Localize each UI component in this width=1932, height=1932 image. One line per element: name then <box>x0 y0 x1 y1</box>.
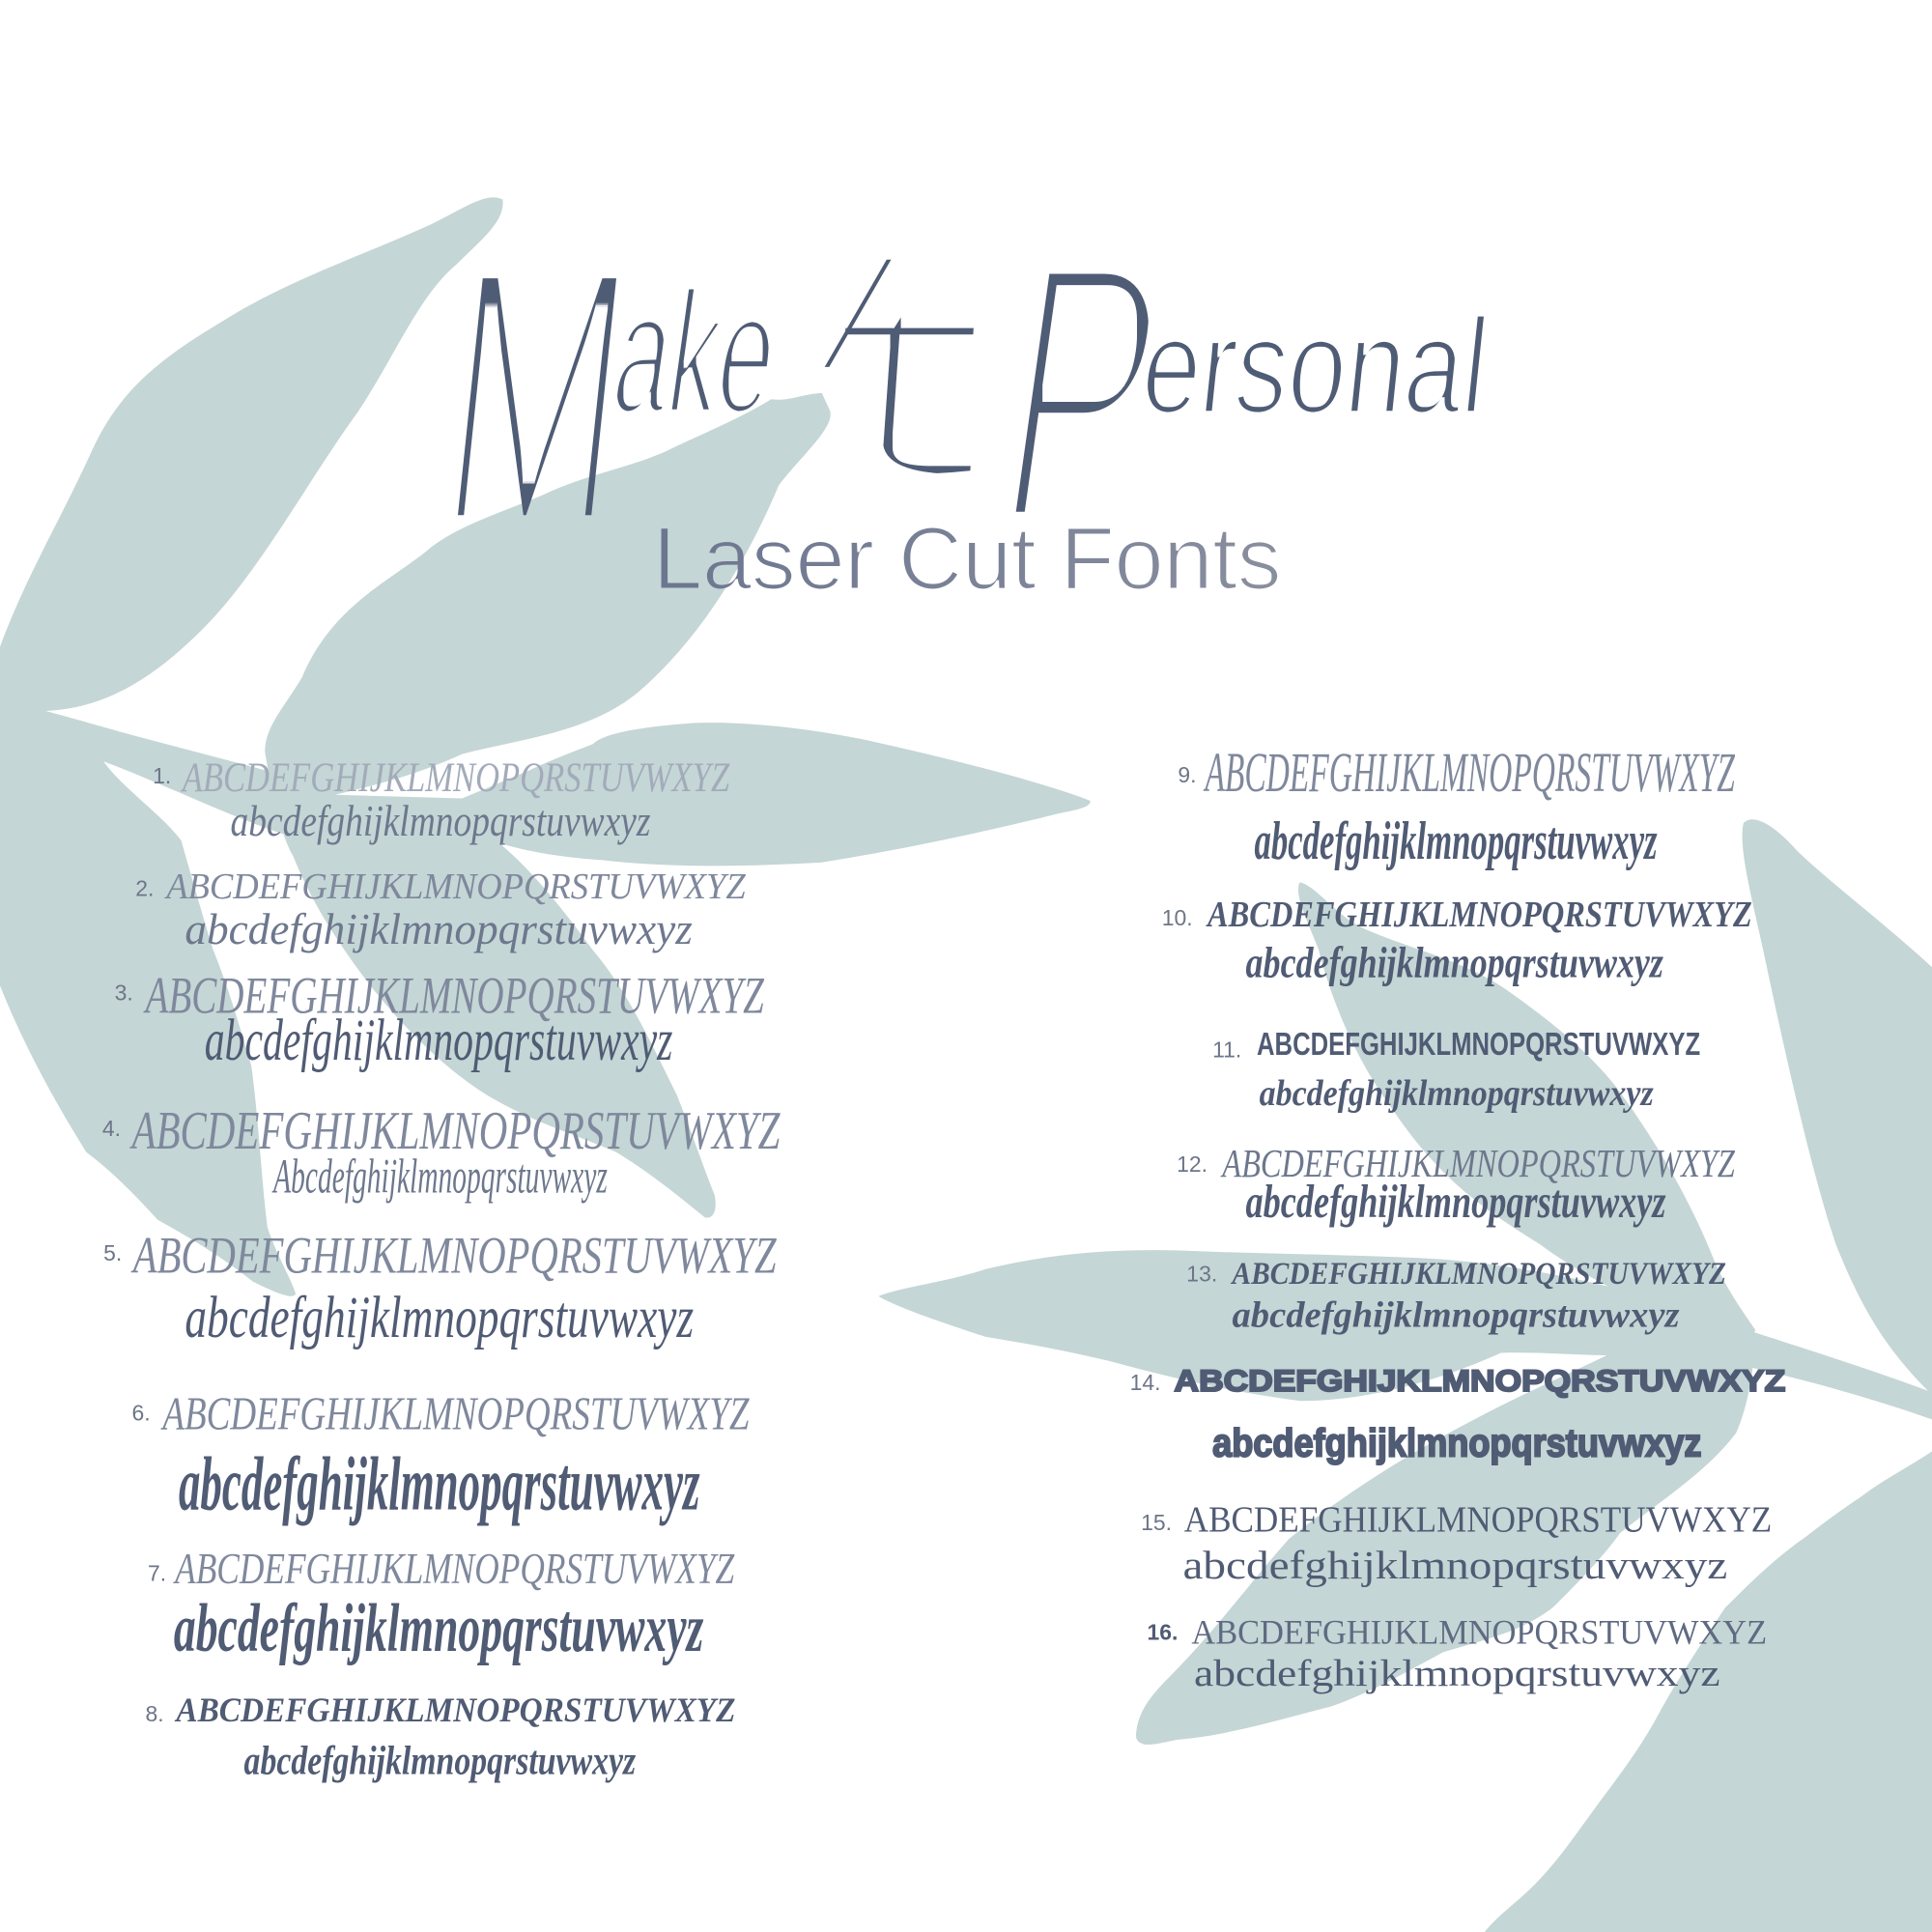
font sample 9: 9. <box>1178 762 1197 787</box>
font sample 2 <box>135 867 746 953</box>
font sample 14: 14. <box>1130 1370 1161 1395</box>
font sample 12: ABCDEFGHIJKLMNOPQRSTUVWXYZ <box>1220 1142 1736 1185</box>
title <box>426 186 1495 599</box>
font sample 6: abcdefghijklmnopqrstuvwxyz <box>179 1442 700 1526</box>
title word: It: t <box>790 211 1026 541</box>
leaf: horizontal right <box>878 1250 1754 1401</box>
font sample 15: ABCDEFGHIJKLMNOPQRSTUVWXYZ <box>1184 1499 1772 1540</box>
font sample 7: 7. <box>148 1560 166 1585</box>
botanical illustration: left branch <box>0 197 1091 1296</box>
font sample 14 <box>1130 1363 1785 1465</box>
font sample 11: ABCDEFGHIJKLMNOPQRSTUVWXYZ <box>1257 1027 1700 1063</box>
botanical illustration: right branch <box>878 819 1932 1932</box>
leaf: lower centre right <box>1136 1336 1754 1745</box>
font sample 16: ABCDEFGHIJKLMNOPQRSTUVWXYZ <box>1191 1613 1767 1652</box>
font sample 5: ABCDEFGHIJKLMNOPQRSTUVWXYZ <box>130 1227 777 1285</box>
font sample 3 <box>115 966 765 1073</box>
font sample 1: ABCDEFGHIJKLMNOPQRSTUVWXYZ <box>180 754 730 801</box>
font list: left column <box>102 754 781 1784</box>
leaf: long diagonal right <box>1298 882 1756 1337</box>
font sample 7: ABCDEFGHIJKLMNOPQRSTUVWXYZ <box>173 1544 735 1593</box>
font sample 16: 16. <box>1148 1620 1178 1645</box>
font sample 7: abcdefghijklmnopqrstuvwxyz <box>174 1590 703 1666</box>
title word: Make: M <box>426 201 648 593</box>
font sample 10: abcdefghijklmnopqrstuvwxyz <box>1246 937 1663 986</box>
font sample 12: 12. <box>1177 1151 1208 1177</box>
title word: Personal: ersonal <box>1135 291 1495 441</box>
font sample 13: abcdefghijklmnopqrstuvwxyz <box>1233 1295 1680 1336</box>
font sample 2: 2. <box>135 875 154 900</box>
leaf: long diagonal left <box>283 813 716 1218</box>
font sample 14: abcdefghijklmnopqrstuvwxyz <box>1212 1421 1701 1465</box>
font sample 12 <box>1177 1142 1736 1228</box>
leaf: upper right <box>1743 819 1932 1395</box>
font sample 1 <box>153 754 730 845</box>
font sample 15: abcdefghijklmnopqrstuvwxyz <box>1182 1544 1727 1587</box>
font sample 4: 4. <box>102 1116 121 1141</box>
font sample 9 <box>1178 741 1736 871</box>
font sample 3: ABCDEFGHIJKLMNOPQRSTUVWXYZ <box>143 966 765 1024</box>
font sample 10: ABCDEFGHIJKLMNOPQRSTUVWXYZ <box>1206 895 1752 935</box>
stem: right <box>1719 1321 1932 1419</box>
font sample 4: ABCDEFGHIJKLMNOPQRSTUVWXYZ <box>129 1101 781 1161</box>
title word: Personal <box>980 186 1495 599</box>
font sample 14: ABCDEFGHIJKLMNOPQRSTUVWXYZ <box>1175 1363 1785 1398</box>
title word: It <box>788 211 1026 541</box>
title word: It: I <box>788 223 927 403</box>
font sample 5 <box>103 1227 777 1350</box>
leaf: centre left <box>265 393 831 795</box>
font sample 8: ABCDEFGHIJKLMNOPQRSTUVWXYZ <box>175 1690 735 1729</box>
font sample 12: abcdefghijklmnopqrstuvwxyz <box>1246 1177 1666 1228</box>
font sample 3: abcdefghijklmnopqrstuvwxyz <box>205 1008 673 1073</box>
font sample 9: abcdefghijklmnopqrstuvwxyz <box>1254 811 1658 871</box>
font sample 3: 3. <box>115 980 133 1006</box>
font sample 10: 10. <box>1162 905 1193 930</box>
font sample 4 <box>102 1101 781 1205</box>
font sample 10 <box>1162 895 1752 986</box>
subtitle: Laser Cut Fonts <box>653 510 1282 609</box>
font sample 8 <box>146 1690 735 1784</box>
title word: Make: ake <box>604 254 788 450</box>
font sample 7 <box>148 1544 735 1666</box>
font sample 16 <box>1148 1613 1767 1694</box>
font sample 16: abcdefghijklmnopqrstuvwxyz <box>1194 1652 1720 1694</box>
title word: Make <box>426 201 788 593</box>
font sample 15 <box>1141 1499 1772 1587</box>
font sample 13: 13. <box>1186 1262 1217 1287</box>
font sample 4: Abcdefghijklmnopqrstuvwxyz <box>271 1151 608 1205</box>
font sample 2: ABCDEFGHIJKLMNOPQRSTUVWXYZ <box>163 867 746 907</box>
font sample 15: 15. <box>1141 1510 1172 1535</box>
font sample 8: abcdefghijklmnopqrstuvwxyz <box>244 1739 637 1784</box>
leaf: horizontal left <box>308 723 1091 866</box>
leaf: upper left <box>0 197 503 727</box>
font sample 8: 8. <box>146 1701 164 1726</box>
font sample 2: abcdefghijklmnopqrstuvwxyz <box>185 904 693 953</box>
font sample 1: 1. <box>153 763 171 788</box>
font sample 13 <box>1186 1256 1726 1336</box>
font sample 6: ABCDEFGHIJKLMNOPQRSTUVWXYZ <box>160 1389 750 1440</box>
leaf: bottom right <box>1485 1452 1932 1932</box>
font sample 5: abcdefghijklmnopqrstuvwxyz <box>185 1285 694 1350</box>
font sample 11: abcdefghijklmnopqrstuvwxyz <box>1260 1073 1654 1114</box>
font sample 6 <box>131 1389 750 1526</box>
font sample 1: abcdefghijklmnopqrstuvwxyz <box>231 796 651 845</box>
font sample 6: 6. <box>131 1401 151 1426</box>
leaf and stem: lower left <box>0 690 370 1296</box>
title word: Personal: P <box>980 186 1185 599</box>
font sample 13: ABCDEFGHIJKLMNOPQRSTUVWXYZ <box>1231 1256 1726 1292</box>
font sample 5: 5. <box>103 1240 122 1265</box>
font list: right column <box>1130 741 1785 1694</box>
font sample 11: 11. <box>1212 1037 1241 1062</box>
font sample 11 <box>1212 1027 1700 1114</box>
